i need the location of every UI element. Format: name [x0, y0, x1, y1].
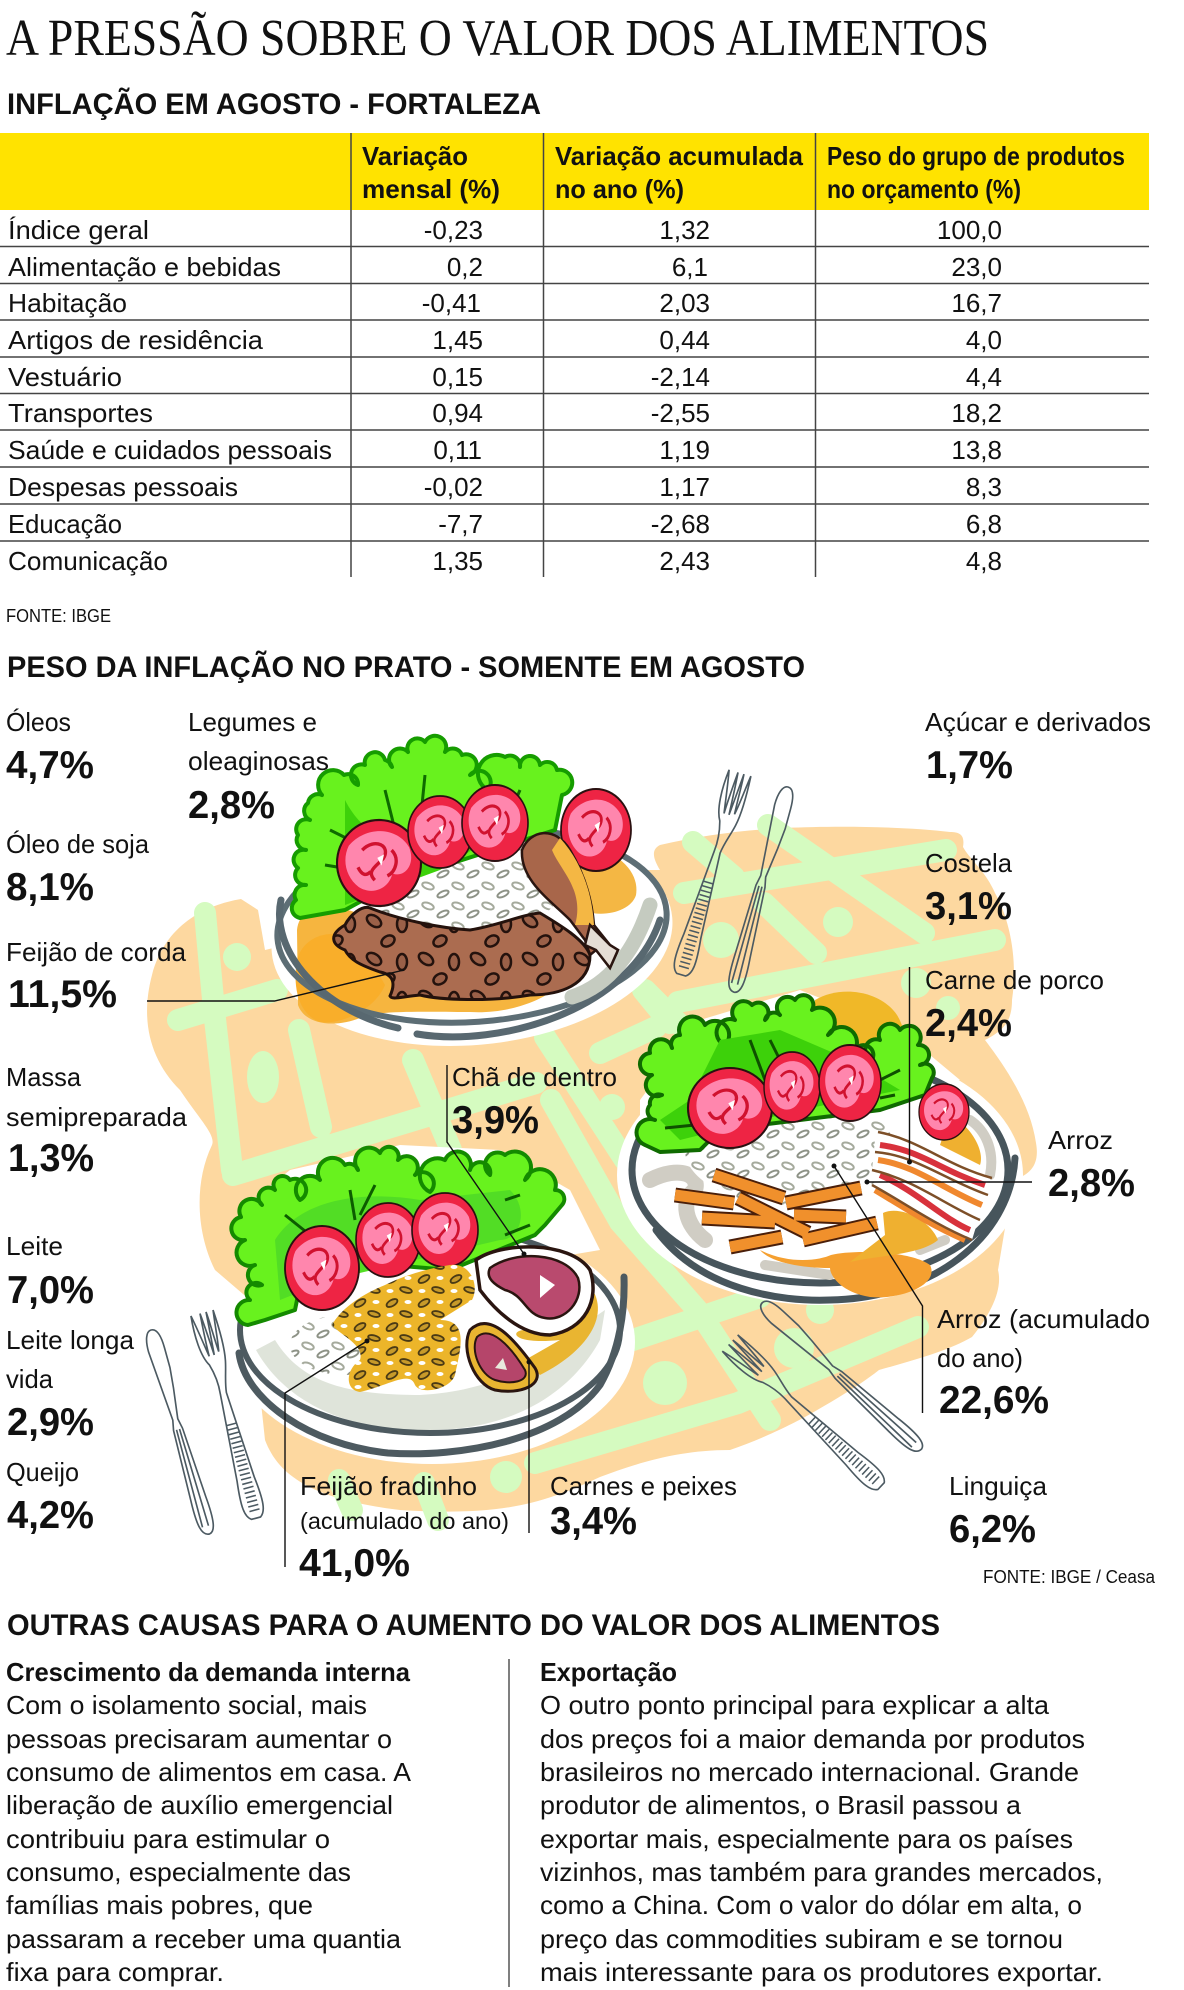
- label: Costela: Costela: [925, 848, 1013, 878]
- source: IBGE: FONTE: IBGE: [6, 606, 111, 626]
- column: variação acumulada: 1,19: [659, 435, 710, 465]
- tomatoes: [337, 785, 631, 906]
- label: Leite longa vida: Leite longa: [6, 1325, 135, 1355]
- chicken drumstick: [522, 833, 618, 968]
- label: Feijão fradinho: Feijão fradinho: [300, 1471, 477, 1501]
- table row labels: Artigos de residência: [8, 325, 264, 355]
- label: Costela: [925, 848, 1013, 928]
- label: Carne de porco: Carne de porco: [925, 965, 1104, 995]
- text block: exportação: mais interessante para os produtores exportar.: [540, 1957, 1103, 1987]
- text block: crescimento da demanda interna: consumo, especialmente das: [6, 1857, 351, 1887]
- label: Leite longa vida: 2,9%: [7, 1401, 94, 1444]
- column: variação mensal: -0,02: [424, 472, 483, 502]
- label: Massa semipreparada: semipreparada: [6, 1102, 188, 1132]
- label: Queijo: [6, 1457, 94, 1537]
- food category labels: [6, 707, 1151, 1585]
- column: variação mensal: -0,23: [424, 215, 483, 245]
- text block: crescimento da demanda interna: [6, 1657, 412, 1987]
- text block: exportação: dos preços foi a maior demanda por produtos: [540, 1724, 1085, 1754]
- text block: exportação: vizinhos, mas também para grandes mercados,: [540, 1857, 1103, 1887]
- label: Massa semipreparada: [6, 1062, 188, 1180]
- french fries: [675, 1175, 877, 1247]
- column: variação mensal: 0,2: [447, 252, 483, 282]
- label: Carne de porco: [925, 965, 1104, 1045]
- label: Arroz: Arroz: [1048, 1125, 1113, 1155]
- label: Carnes e peixes: 3,4%: [550, 1500, 637, 1543]
- illustration: top plate: [262, 736, 682, 1062]
- lettuce: [637, 995, 934, 1152]
- text block: crescimento da demanda interna: liberação de auxílio emergencial: [6, 1790, 393, 1820]
- label: Chã de dentro: 3,9%: [452, 1099, 539, 1142]
- tomatoes: [688, 1045, 969, 1148]
- label: Carnes e peixes: [550, 1471, 737, 1543]
- label: Feijão de corda: [6, 937, 187, 1016]
- label: Arroz: 2,8%: [1048, 1162, 1135, 1205]
- table header labels: Peso do grupo de produtos: [827, 141, 1125, 171]
- table row labels: Comunicação: [8, 546, 168, 576]
- illustration: cutlery bottom right: [722, 1296, 926, 1495]
- label: Feijão fradinho: [299, 1471, 509, 1585]
- column: peso no orçamento: [937, 215, 1002, 576]
- text block: exportação: como a China. Com o valor do dólar em alta, o: [540, 1890, 1082, 1920]
- label: Açúcar e derivados: [925, 707, 1151, 787]
- column: variação acumulada: -2,14: [651, 362, 710, 392]
- column: variação mensal: -0,41: [422, 288, 481, 318]
- text block: exportação: O outro ponto principal para explicar a alta: [540, 1690, 1050, 1720]
- meat steak large: [476, 1247, 593, 1335]
- column: peso no orçamento: 13,8: [951, 435, 1002, 465]
- column: peso no orçamento: 18,2: [951, 398, 1002, 428]
- illustration: cutlery top: [670, 770, 797, 994]
- table: inflação em agosto: [0, 133, 1149, 577]
- table header band: [0, 133, 1149, 210]
- label: Legumes e oleaginosas: 2,8%: [188, 784, 275, 827]
- column: variação acumulada: -2,55: [651, 398, 710, 428]
- meat steak small: [467, 1324, 537, 1391]
- text block: exportação: exportar mais, especialmente para os países: [540, 1824, 1073, 1854]
- column: variação mensal: 0,94: [432, 398, 483, 428]
- text block: crescimento da demanda interna: passaram a receber uma quantia: [6, 1924, 402, 1954]
- label: Óleo de soja: 8,1%: [6, 866, 94, 909]
- label: Queijo: Queijo: [6, 1457, 79, 1487]
- tomatoes: [285, 1193, 478, 1310]
- label: Costela: 3,1%: [925, 885, 1012, 928]
- column: peso no orçamento: 100,0: [937, 215, 1002, 245]
- label: Feijão fradinho: (acumulado do ano): [300, 1508, 509, 1534]
- label: Arroz acumulado do ano: [937, 1304, 1150, 1422]
- source: IBGE / Ceasa: FONTE: IBGE / Ceasa: [983, 1567, 1156, 1587]
- text block: exportação: [540, 1657, 1103, 1987]
- leader lines: [147, 967, 1032, 1567]
- column: variação acumulada: 2,43: [659, 546, 710, 576]
- heading: inflação em agosto: INFLAÇÃO EM AGOSTO - FORTALEZA: [7, 87, 541, 121]
- column: variação mensal: 0,11: [433, 435, 482, 465]
- label: Óleo de soja: [6, 829, 150, 909]
- column: peso no orçamento: 4,0: [966, 325, 1002, 355]
- label: Chã de dentro: [452, 1062, 617, 1142]
- label: Chã de dentro: Chã de dentro: [452, 1062, 617, 1092]
- label: Massa semipreparada: Massa: [6, 1062, 82, 1092]
- label: Feijão fradinho: 41,0%: [299, 1542, 410, 1585]
- label: Leite: Leite: [6, 1231, 63, 1261]
- table header labels: [362, 141, 1125, 204]
- label: Óleos: 4,7%: [6, 744, 94, 787]
- label: Linguiça: [949, 1471, 1048, 1551]
- label: Linguiça: 6,2%: [949, 1508, 1036, 1551]
- column: variação mensal: [422, 215, 483, 576]
- label: Feijão de corda: Feijão de corda: [6, 937, 187, 967]
- text block: exportação: brasileiros no mercado internacional. Grande: [540, 1757, 1079, 1787]
- column: peso no orçamento: 4,8: [966, 546, 1002, 576]
- label: Óleos: [6, 707, 94, 787]
- title: A PRESSÃO SOBRE O VALOR DOS ALIMENTOS: [6, 10, 989, 67]
- text block: crescimento da demanda interna: Com o isolamento social, mais: [6, 1690, 367, 1720]
- column: peso no orçamento: 6,8: [966, 509, 1002, 539]
- heading: outras causas: OUTRAS CAUSAS PARA O AUMENTO DO VALOR DOS ALIMENTOS: [7, 1609, 940, 1642]
- column: variação acumulada: 6,1: [672, 252, 708, 282]
- label: Leite longa vida: vida: [6, 1364, 54, 1394]
- label: Arroz acumulado do ano: do ano): [937, 1343, 1023, 1373]
- illustration: right plate: [617, 990, 1023, 1305]
- label: Carne de porco: 2,4%: [925, 1002, 1012, 1045]
- table header labels: Variação: [362, 141, 468, 171]
- column: variação acumulada: [651, 215, 710, 576]
- column: variação mensal: 1,45: [432, 325, 483, 355]
- label: Carnes e peixes: Carnes e peixes: [550, 1471, 737, 1501]
- label: Arroz: [1048, 1125, 1135, 1205]
- table row labels: Índice geral: [8, 215, 149, 245]
- text block: exportação: produtor de alimentos, o Brasil passou a: [540, 1790, 1022, 1820]
- label: Legumes e oleaginosas: oleaginosas: [188, 746, 329, 776]
- column: variação mensal: 0,15: [432, 362, 483, 392]
- text block: crescimento da demanda interna: fixa para comprar.: [6, 1957, 224, 1987]
- label: Linguiça: Linguiça: [949, 1471, 1048, 1501]
- column: peso no orçamento: 23,0: [951, 252, 1002, 282]
- label: Açúcar e derivados: Açúcar e derivados: [925, 707, 1151, 737]
- table header labels: mensal (%): [362, 174, 500, 204]
- table row labels: Habitação: [8, 288, 127, 318]
- illustration: cutlery bottom left: [143, 1310, 269, 1537]
- table row labels: Vestuário: [8, 362, 122, 392]
- text block: crescimento da demanda interna: contribuiu para estimular o: [6, 1824, 330, 1854]
- column: variação acumulada: 0,44: [659, 325, 710, 355]
- label: Óleo de soja: Óleo de soja: [6, 829, 150, 859]
- label: Arroz acumulado do ano: 22,6%: [939, 1379, 1049, 1422]
- column: variação acumulada: -2,68: [651, 509, 710, 539]
- column: peso no orçamento: 4,4: [966, 362, 1002, 392]
- table row labels: Transportes: [8, 398, 153, 428]
- table row labels: Educação: [8, 509, 122, 539]
- table header labels: no ano (%): [555, 174, 684, 204]
- heading: peso da inflação no prato: PESO DA INFLAÇÃO NO PRATO - SOMENTE EM AGOSTO: [7, 650, 805, 684]
- illustration: background map blob: [147, 825, 1037, 1520]
- text block: crescimento da demanda interna: Crescimento da demanda interna: [6, 1657, 411, 1687]
- text block: exportação: Exportação: [540, 1657, 677, 1687]
- text block: exportação: preço das commodities subiram e se tornou: [540, 1924, 1063, 1954]
- table header labels: Variação acumulada: [555, 141, 804, 171]
- lettuce: [292, 736, 572, 918]
- label: Legumes e oleaginosas: Legumes e: [188, 707, 317, 737]
- illustration: left plate: [229, 1145, 635, 1464]
- label: Açúcar e derivados: 1,7%: [926, 744, 1013, 787]
- column: variação acumulada: 1,32: [659, 215, 710, 245]
- column: variação acumulada: 1,17: [659, 472, 710, 502]
- column: peso no orçamento: 16,7: [951, 288, 1002, 318]
- label: Leite: 7,0%: [7, 1269, 94, 1312]
- column: variação mensal: 1,35: [432, 546, 483, 576]
- table row labels: Despesas pessoais: [8, 472, 238, 502]
- lettuce: [231, 1147, 564, 1325]
- label: Leite longa vida: [6, 1325, 135, 1444]
- text block: crescimento da demanda interna: famílias mais pobres, que: [6, 1890, 313, 1920]
- table row labels: [8, 215, 332, 576]
- label: Óleos: Óleos: [6, 707, 71, 737]
- label: Massa semipreparada: 1,3%: [8, 1137, 94, 1180]
- label: Queijo: 4,2%: [7, 1494, 94, 1537]
- bacon sausage: [872, 1130, 992, 1240]
- table row labels: Alimentação e bebidas: [8, 252, 281, 282]
- text block: crescimento da demanda interna: pessoas precisaram aumentar o: [6, 1724, 392, 1754]
- yellow beans: [332, 1265, 475, 1392]
- label: Arroz acumulado do ano: Arroz (acumulado: [937, 1304, 1150, 1334]
- text block: crescimento da demanda interna: consumo de alimentos em casa. A: [6, 1757, 412, 1787]
- label: Legumes e oleaginosas: [188, 707, 329, 827]
- column: variação mensal: -7,7: [438, 509, 483, 539]
- label: Leite: [6, 1231, 94, 1312]
- table header labels: no orçamento (%): [827, 174, 1021, 204]
- label: Feijão de corda: 11,5%: [8, 973, 117, 1016]
- table row labels: Saúde e cuidados pessoais: [8, 435, 332, 465]
- black-eyed beans: [334, 907, 590, 1000]
- column: peso no orçamento: 8,3: [966, 472, 1002, 502]
- column: variação acumulada: 2,03: [659, 288, 710, 318]
